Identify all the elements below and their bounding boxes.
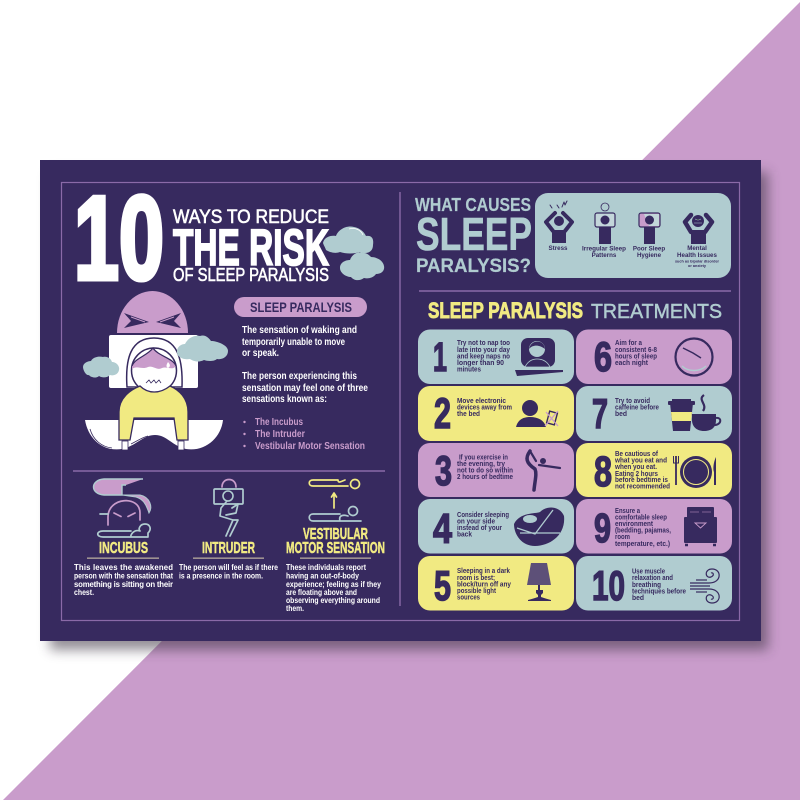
card 3: 3 xyxy=(435,447,452,494)
icon: yoga pose xyxy=(527,451,560,490)
card 3: 2 hours of bedtime xyxy=(457,474,513,481)
card 6: 6 xyxy=(594,333,612,380)
card 5: sources xyxy=(457,594,480,602)
definition text: sensation may feel one of three xyxy=(242,383,368,394)
card 9: temperature, etc.) xyxy=(615,541,670,548)
title clouds xyxy=(323,227,384,280)
definition text: The person experiencing this xyxy=(242,371,357,382)
definition text: sensations known as: xyxy=(242,394,327,405)
title: OF SLEEP PARALYSIS xyxy=(173,265,329,285)
card 9: environment xyxy=(615,521,654,528)
card 3: not to do so within xyxy=(457,468,513,474)
text: intruder: is a presence in the room. xyxy=(179,572,263,580)
card 1: minutes xyxy=(457,366,481,374)
text: vestibular motor sensation: them. xyxy=(286,604,304,613)
card 10: Use muscle xyxy=(632,568,665,576)
definition text xyxy=(242,325,368,405)
icon: stress xyxy=(546,201,572,243)
icon: person and crossed phone xyxy=(516,400,558,427)
text: incubus: something is sitting on their xyxy=(74,580,173,589)
card 4: 4 xyxy=(433,505,453,552)
text: vestibular motor sensation: These individuals report xyxy=(286,563,366,572)
card 8: Be cautious of xyxy=(615,451,659,458)
cause labels: such as bipolar disorder xyxy=(675,260,720,264)
card 4: back xyxy=(457,532,472,538)
card 10: breathing xyxy=(632,582,661,589)
heading: vestibular motor sensation xyxy=(286,526,385,559)
sensation list xyxy=(243,417,365,452)
card 8: when you eat. xyxy=(614,464,657,471)
icon: mental health issues xyxy=(685,215,712,244)
card 1: and keep naps no xyxy=(457,354,510,360)
title xyxy=(74,172,329,305)
heading pill: sleep paralysis xyxy=(234,297,367,317)
title: THE RISK xyxy=(173,219,329,276)
heading: treatments xyxy=(428,298,722,323)
card 3 xyxy=(418,443,574,497)
card 6: hours of sleep xyxy=(615,354,657,360)
title: 10 xyxy=(74,172,164,305)
card 1: 1 xyxy=(433,334,447,380)
card 10: 10 xyxy=(592,562,625,609)
card 6 xyxy=(576,330,732,384)
icon: intruder xyxy=(214,480,243,536)
text: vestibular motor sensation: are floating above and xyxy=(286,588,357,597)
card 9: Ensure a xyxy=(615,508,640,515)
text: intruder xyxy=(179,563,279,580)
card 6: Aim for a xyxy=(615,340,642,347)
card 10: bed xyxy=(632,595,644,602)
card 8: Eating 2 hours xyxy=(615,471,658,478)
heading: what causes sleep paralysis xyxy=(415,195,532,277)
text: vestibular motor sensation: observing everything around xyxy=(286,596,380,605)
card 7: caffeine before xyxy=(615,404,659,412)
heading: vestibular motor sensation: VESTIBULAR xyxy=(303,526,368,543)
cause labels: Patterns xyxy=(592,252,617,259)
icon: woman napping xyxy=(515,338,563,376)
heading: intruder xyxy=(193,540,264,559)
panel: causes xyxy=(535,193,731,278)
card 8: 8 xyxy=(594,448,612,496)
card 1: longer than 90 xyxy=(457,360,504,367)
card 2: 2 xyxy=(434,390,451,438)
cause labels: Irregular Sleep xyxy=(582,246,626,252)
card 9: room xyxy=(615,534,630,541)
card 5: block/turn off any xyxy=(457,582,511,588)
card 1 xyxy=(418,330,574,384)
cause labels: Hygiene xyxy=(637,252,662,259)
cause labels: or anxiety xyxy=(688,264,707,268)
card 5 xyxy=(418,556,574,610)
card 9 xyxy=(576,499,732,554)
card 10: techniques before xyxy=(632,588,686,596)
card 7: bed xyxy=(615,411,627,418)
icon: clock xyxy=(676,338,712,376)
icon: lamp xyxy=(527,563,551,601)
definition text: The sensation of waking and xyxy=(242,325,357,336)
poster shadow xyxy=(50,172,768,650)
card 1: Try not to nap too xyxy=(457,340,510,347)
card 5: 5 xyxy=(434,562,451,609)
card 9: comfortable sleep xyxy=(615,514,667,522)
card 9: 9 xyxy=(594,505,611,551)
text: vestibular motor sensation: experience; feeling as if they xyxy=(286,580,382,589)
icon: wind xyxy=(690,569,719,603)
card 3: If you exercise in xyxy=(459,454,508,462)
text: incubus: This leaves the awakened xyxy=(74,563,173,572)
card 4: instead of your xyxy=(457,525,502,532)
card 2: devices away from xyxy=(457,404,512,412)
card 10 xyxy=(576,556,732,610)
cause labels: Poor Sleep xyxy=(633,246,665,252)
card 6: consistent 6-8 xyxy=(615,347,657,354)
card 5: possible light xyxy=(457,588,497,595)
icon: vestibular motor sensation xyxy=(309,480,361,521)
card 2: Move electronic xyxy=(457,398,506,405)
icon: irregular sleep patterns xyxy=(595,203,615,244)
heading: treatments: SLEEP PARALYSIS xyxy=(428,298,583,323)
definition text: or speak. xyxy=(242,348,279,359)
heading: what causes sleep paralysis: PARALYSIS? xyxy=(416,256,531,277)
card 6: each night xyxy=(615,360,649,367)
heading: incubus: INCUBUS xyxy=(99,540,148,557)
sensation list: The Intruder xyxy=(255,429,305,440)
card 7: Try to avoid xyxy=(615,398,650,405)
cause labels: Stress xyxy=(549,245,568,252)
card 5: Sleeping in a dark xyxy=(457,568,510,575)
card 2: the bed xyxy=(457,411,480,418)
cause labels: Health Issues xyxy=(677,252,717,259)
icon: plate and cutlery xyxy=(674,456,716,488)
text: intruder: The person will feel as if there xyxy=(179,563,279,572)
icon: side sleeper xyxy=(514,507,564,546)
heading: what causes sleep paralysis: SLEEP xyxy=(416,208,532,260)
text: incubus: person with the sensation that xyxy=(74,572,173,580)
card 8: before bedtime is xyxy=(615,477,668,484)
card 9: (bedding, pajamas, xyxy=(615,528,671,534)
sensation list: The Incubus xyxy=(255,417,303,428)
card 1: late into your day xyxy=(457,347,510,354)
card 8: not recommended xyxy=(615,484,670,490)
icon: coffee cups xyxy=(668,395,720,431)
icon: poor sleep hygiene xyxy=(639,213,660,244)
card 4: Consider sleeping xyxy=(457,512,509,519)
card 8: what you eat and xyxy=(614,458,667,464)
sensation list: Vestibular Motor Sensation xyxy=(255,441,365,452)
card 3: the evening, try xyxy=(457,461,505,468)
heading: what causes sleep paralysis: WHAT CAUSES xyxy=(415,195,531,215)
card 7 xyxy=(576,386,732,441)
card 2 xyxy=(418,386,574,441)
title: WAYS TO REDUCE xyxy=(173,207,329,228)
text: incubus xyxy=(74,563,173,597)
text: vestibular motor sensation: having an out-of-body xyxy=(286,572,360,580)
heading: vestibular motor sensation: MOTOR SENSATION xyxy=(286,540,385,557)
card 4: on your side xyxy=(457,518,495,526)
card 5: room is best; xyxy=(457,575,495,582)
heading pill: sleep paralysis: SLEEP PARALYSIS xyxy=(250,299,352,315)
sleep paralysis figure xyxy=(83,291,228,450)
text: incubus: chest. xyxy=(74,588,94,597)
cause labels xyxy=(549,245,720,268)
card 7: 7 xyxy=(592,390,608,437)
heading: incubus xyxy=(87,540,159,559)
card 10: relaxation and xyxy=(632,575,673,582)
heading: intruder: INTRUDER xyxy=(202,540,255,557)
definition text: temporarily unable to move xyxy=(242,337,345,348)
cause labels: Mental xyxy=(687,245,707,252)
heading: treatments: TREATMENTS xyxy=(591,301,722,323)
card 8 xyxy=(576,443,732,497)
icon: incubus xyxy=(94,479,151,537)
card 4 xyxy=(418,499,574,554)
poster panel xyxy=(40,160,761,641)
text: vestibular motor sensation xyxy=(286,563,382,613)
icon: bed xyxy=(684,507,717,545)
